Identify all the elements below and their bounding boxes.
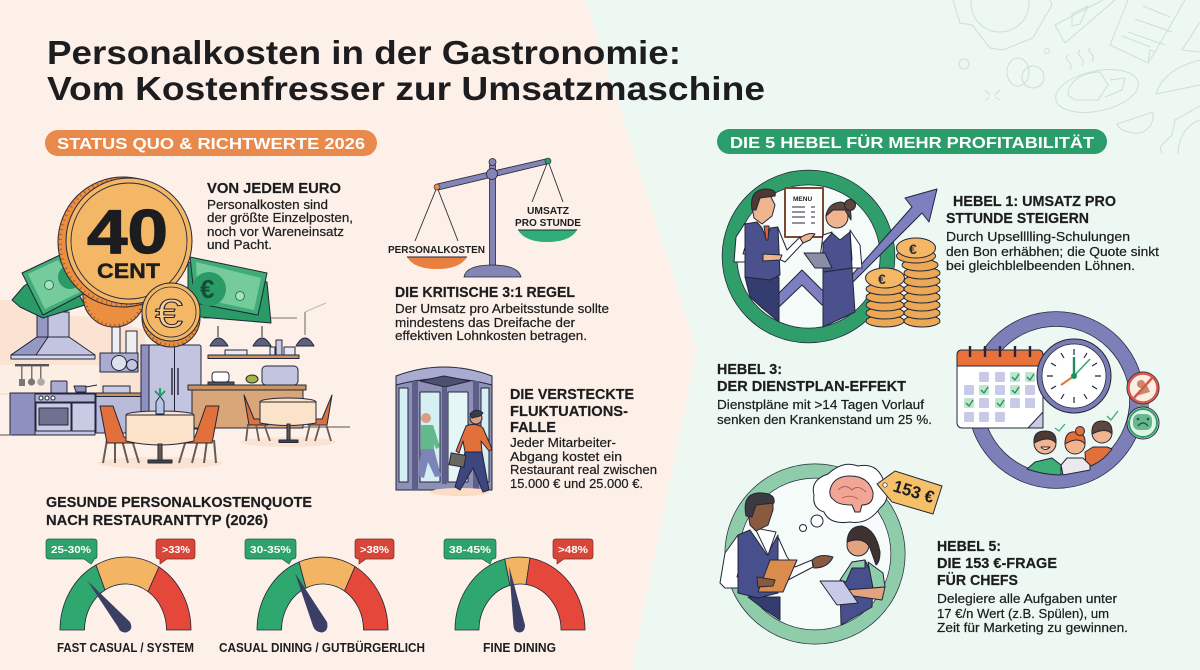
employee [820, 526, 885, 625]
calendar [957, 346, 1043, 428]
shelf and pendant lamps [203, 303, 326, 358]
gauge: casual dining [219, 539, 425, 655]
green ring [730, 178, 888, 336]
section pill: status quo: STATUS QUO & RICHTWERTE 2026 [57, 136, 365, 153]
section pill: hebel [717, 129, 1107, 154]
section pill: status quo [45, 130, 377, 156]
fridge [141, 345, 201, 429]
icon: sad face badge [1127, 407, 1159, 439]
rising arrow [779, 189, 937, 307]
icon: balance scale: PERSONALKOSTEN [388, 244, 485, 256]
text block: von jedem euro: Personalkosten sind [207, 197, 328, 212]
text block: fluktuations-falle: Abgang kostet ein [510, 449, 622, 464]
front dining table [98, 388, 222, 469]
text block: 3:1 regel: DIE KRITISCHE 3:1 REGEL [395, 284, 575, 301]
coin stacks: € [909, 241, 917, 257]
counter [96, 386, 150, 433]
stove [10, 381, 97, 435]
icon: banknotes: € [200, 274, 214, 304]
text block: hebel 5: Delegiere alle Aufgaben unter [937, 591, 1118, 606]
gauge: fine dining: 38-45% [449, 544, 492, 556]
team of three [1027, 411, 1118, 475]
bar counter [188, 366, 306, 428]
text block: fluktuations-falle: Jeder Mitarbeiter- [510, 435, 616, 450]
text block: fluktuations-falle: Restaurant real zwischen [510, 462, 657, 477]
title: Personalkosten in der Gastronomie: [47, 34, 681, 71]
light green ring [732, 471, 898, 637]
gauge: fast casual: FAST CASUAL / SYSTEM [57, 641, 194, 655]
text block: hebel 5: Zeit für Marketing zu gewinnen. [937, 620, 1128, 635]
icon: banknotes [12, 255, 271, 323]
text block: hebel 3: Dienstpläne mit >14 Tagen Vorlauf [717, 397, 924, 412]
text block: von jedem euro: der größte Einzelposten, [207, 210, 353, 225]
manager [720, 493, 833, 620]
calendar cells [964, 372, 1035, 422]
icon: balance scale [388, 158, 581, 277]
text block: fluktuations-falle: FLUKTUATIONS- [510, 403, 628, 420]
menu board [785, 188, 823, 237]
section pill: hebel: DIE 5 HEBEL FÜR MEHR PROFITABILITÄT [730, 133, 1094, 152]
text block: hebel 1 [946, 193, 1159, 273]
text block: hebel 3: DER DIENSTPLAN-EFFEKT [717, 378, 906, 395]
text block: hebel 1: HEBEL 1: UMSATZ PRO [953, 193, 1116, 210]
text block: hebel 5: 17 €/n Wert (z.B. Spülen), um [937, 606, 1109, 621]
text block: 3:1 regel: Der Umsatz pro Arbeitsstunde sollte [395, 301, 609, 316]
icon: euro coin [142, 283, 200, 347]
illustration: kitchen and restaurant [0, 300, 350, 469]
icon: balance scale: PRO STUNDE [515, 217, 581, 229]
text block: von jedem euro [207, 180, 353, 252]
clock [1037, 339, 1111, 413]
gauge: fine dining: >48% [558, 544, 589, 556]
gauge: fast casual: >33% [162, 544, 191, 556]
title [47, 34, 765, 107]
text block: hebel 1: den Bon erhäbhen; die Quote sinkt [946, 244, 1159, 259]
text block: fluktuations-falle: FALLE [510, 419, 556, 436]
heading: gesunde personalkostenquote: GESUNDE PERSONALKOSTENQUOTE [46, 494, 312, 511]
icon: balance scale: UMSATZ [527, 205, 570, 217]
illustration: hebel 1 upselling [730, 178, 940, 336]
kitchen hood [11, 312, 95, 359]
purple ring [975, 319, 1137, 481]
icon: 40 cent coin: 40 [87, 198, 168, 267]
price tag [877, 471, 942, 514]
decorative doodles top right [953, 0, 1200, 154]
icon: euro coin: € [155, 292, 183, 336]
icon: 40 cent coin: CENT [97, 260, 160, 283]
text block: fluktuations-falle: DIE VERSTECKTE [510, 386, 634, 403]
icon: no sick [1127, 372, 1159, 410]
gauge: casual dining: >38% [360, 544, 390, 556]
back dining table [240, 395, 336, 447]
text block: hebel 5: HEBEL 5: [937, 538, 1001, 555]
text block: hebel 1: Durch Upselllling-Schulungen [946, 229, 1130, 244]
wall appliance [100, 327, 138, 372]
gauge: casual dining: CASUAL DINING / GUTBÜRGERLICH [219, 640, 425, 655]
text block: hebel 1: bei gleichblelbeenden Löhnen. [946, 258, 1135, 273]
text block: von jedem euro: noch vor Wareneinsatz [207, 224, 344, 239]
illustration: hebel 5 delegation [720, 464, 942, 637]
text block: von jedem euro: VON JEDEM EURO [207, 180, 341, 197]
text block: 3:1 regel: mindestens das Dreifache der [395, 315, 576, 330]
text block: fluktuations-falle [510, 386, 657, 491]
coin stacks [866, 238, 940, 327]
waiter man [734, 189, 815, 322]
icon: 40 cent coin [58, 177, 192, 327]
gauge: fine dining: FINE DINING [483, 641, 556, 655]
gauge: casual dining: 30-35% [250, 544, 292, 556]
waitress [804, 200, 862, 327]
text block: hebel 1: STTUNDE STEIGERN [946, 210, 1089, 227]
heading: gesunde personalkostenquote [46, 494, 312, 529]
text block: hebel 5: FÜR CHEFS [937, 572, 1018, 589]
gauge: fine dining [444, 539, 593, 655]
text block: hebel 3: senken den Krankenstand um 25 %. [717, 412, 932, 427]
text block: 3:1 regel: effektiven Lohnkosten betragen. [395, 328, 587, 343]
utensil rail [15, 364, 49, 386]
background: mint right side [585, 0, 1200, 670]
person leaving (background) [418, 413, 441, 478]
text block: hebel 5 [937, 538, 1128, 635]
text block: 3:1 regel [395, 284, 609, 343]
text block: fluktuations-falle: 15.000 € und 25.000 €. [510, 476, 643, 491]
text block: von jedem euro: und Pacht. [207, 237, 272, 252]
price tag: 153 € [891, 477, 937, 507]
text block: hebel 3: HEBEL 3: [717, 361, 782, 378]
icon: revolving door [396, 367, 492, 496]
title: Vom Kostenfresser zur Umsatzmaschine [47, 70, 765, 107]
thought bubble with brain [800, 464, 887, 532]
heading: gesunde personalkostenquote: NACH RESTAURANTTYP (2026) [46, 512, 268, 529]
coin stacks: € [878, 271, 886, 287]
menu board: MENU [793, 196, 812, 203]
text block: hebel 5: DIE 153 €-FRAGE [937, 555, 1057, 572]
illustration: hebel 3 dienstplan [957, 319, 1159, 481]
gauge: fast casual: 25-30% [51, 544, 92, 556]
gauge: fast casual [46, 539, 195, 655]
text block: hebel 3 [717, 361, 932, 427]
person leaving (foreground) [449, 410, 492, 492]
